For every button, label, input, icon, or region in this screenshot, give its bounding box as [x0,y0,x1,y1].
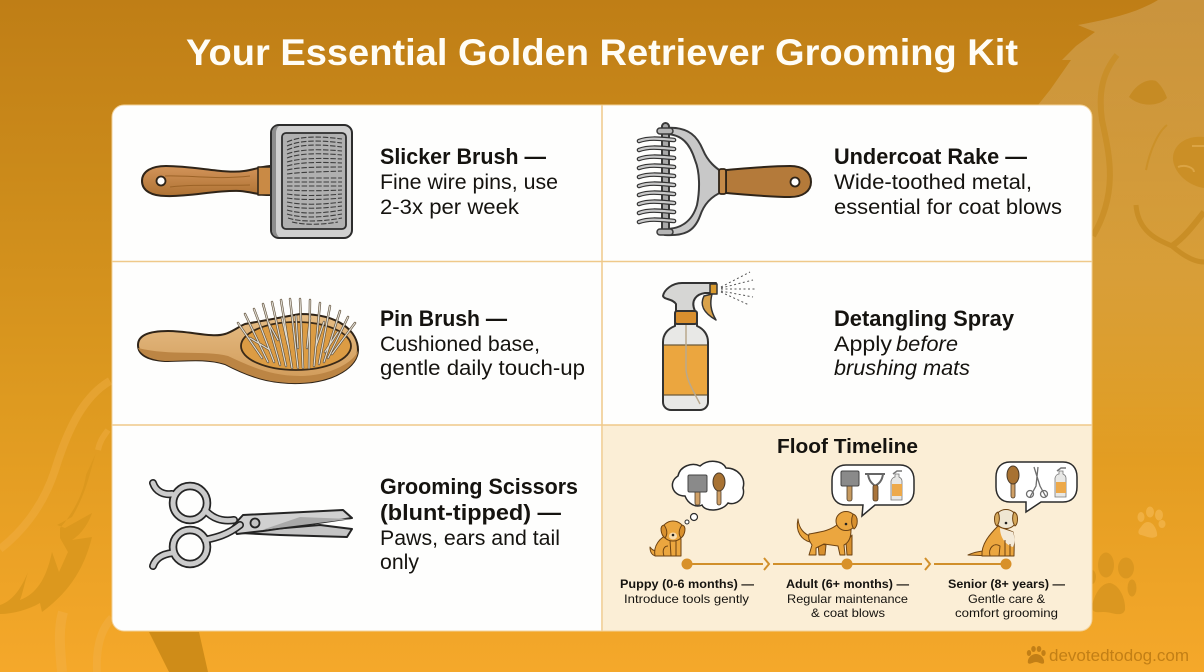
panel: grooming kit card [112,105,1092,631]
background: golden retriever head silhouette [1038,0,1204,460]
text: detangling spray: Detangling Spray [834,306,1015,331]
timeline dot: senior [1000,558,1012,570]
text: undercoat rake [834,144,1062,219]
icon: detangling spray bottle [663,272,755,410]
text: slicker brush: 2-3x per week [380,196,520,219]
text: detangling spray: before [896,333,958,356]
mini spray [891,471,902,500]
scissors: lower blade [240,525,352,537]
mini slicker brush [688,475,707,505]
text: undercoat rake: Undercoat Rake — [834,144,1027,169]
text: slicker brush: Fine wire pins, use [380,171,558,194]
timeline label: puppy: Puppy (0-6 months) — [620,577,754,591]
text: undercoat rake: essential for coat blows [834,196,1062,219]
text: slicker brush [380,144,558,219]
icon detail: brush pins [238,299,355,368]
text: grooming scissors: (blunt-tipped) — [380,500,561,525]
thought bubble: puppy tools [672,461,744,524]
timeline label: senior: Gentle care & [968,592,1045,606]
scissors: upper blade [232,510,352,534]
mini scissors [1026,467,1048,498]
timeline label: senior: Senior (8+ years) — [948,577,1065,591]
icon: pin brush [138,299,358,383]
timeline dot: puppy [682,558,692,570]
scissors: upper handle [153,483,234,521]
text: undercoat rake: Wide-toothed metal, [834,171,1032,194]
background: dog tail silhouette [0,381,208,672]
text: grooming scissors: only [380,551,419,574]
title: Your Essential Golden Retriever Grooming Kit [186,32,1018,73]
icon detail: wire pins [287,137,342,224]
text: pin brush [380,306,585,380]
icon: grooming scissors [153,483,352,566]
timeline label: puppy: Introduce tools gently [624,592,749,606]
watermark: site name: devotedtodog.com [1049,646,1189,665]
icon: undercoat rake [639,123,811,235]
heading: floof timeline: Floof Timeline [777,436,918,458]
icon: watermark paw [1027,646,1046,664]
text: detangling spray [834,306,1015,380]
mini spray [1055,468,1066,497]
mini rake [865,474,885,501]
text: grooming scissors: Paws, ears and tail [380,527,560,550]
speech bubble: senior tools [996,462,1077,512]
panel: floof timeline background [603,425,1092,631]
text: grooming scissors [380,474,578,574]
icon detail: rake teeth [639,139,674,222]
icon: slicker brush [142,125,352,238]
text: pin brush: Pin Brush — [380,306,507,331]
timeline label: adult: Adult (6+ months) — [786,577,909,591]
decorative paw: light [1138,506,1166,538]
speech bubble: adult tools [832,465,914,516]
mini pin brush [1007,466,1019,498]
scissors: lower handle [153,525,240,566]
puppy [650,521,685,556]
mini slicker brush [841,471,859,501]
timeline label: adult: & coat blows [811,606,885,620]
timeline label: puppy [620,577,754,606]
text: slicker brush: Slicker Brush — [380,144,546,169]
text: grooming scissors: Grooming Scissors [380,474,578,499]
text: detangling spray: brushing mats [834,357,971,380]
timeline label: adult: Regular maintenance [787,592,908,606]
text: detangling spray: Apply [834,333,893,356]
timeline label: senior [948,577,1065,620]
timeline line with arrows [687,558,1006,570]
decorative paw: dark [1088,552,1136,614]
text: pin brush: gentle daily touch-up [380,357,585,380]
adult dog [797,512,857,555]
timeline dot: adult [842,558,852,570]
mini pin brush [713,473,725,505]
timeline label: senior: comfort grooming [955,606,1058,620]
text: pin brush: Cushioned base, [380,333,540,356]
senior dog [968,510,1018,556]
timeline label: adult [786,577,909,620]
